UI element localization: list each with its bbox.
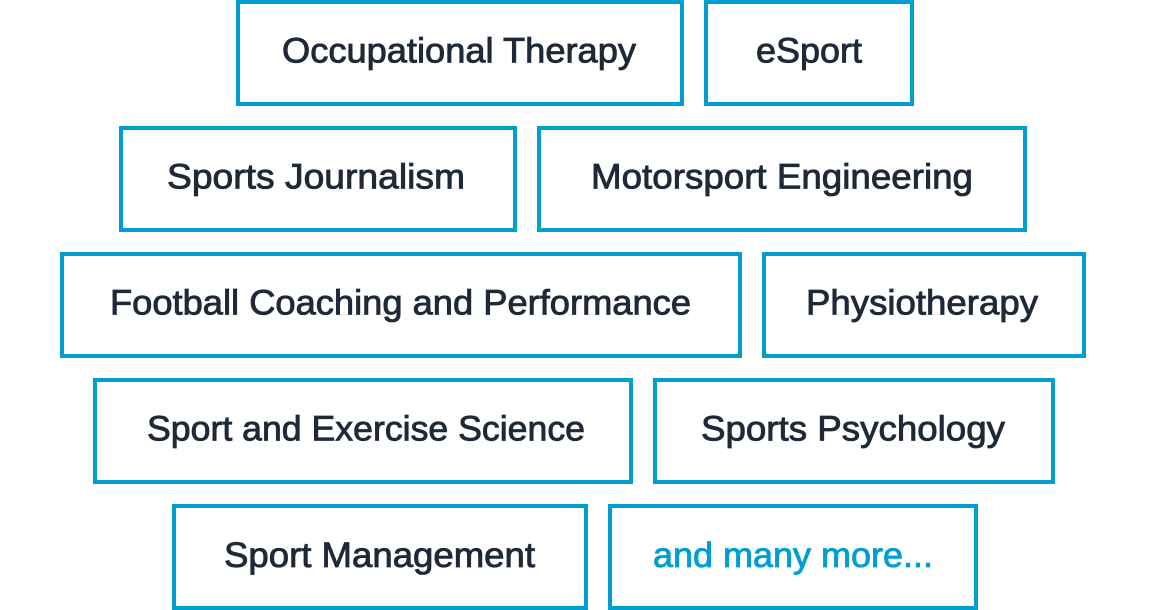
tag: Physiotherapy [764, 254, 1084, 356]
tag: Motorsport Engineering [539, 128, 1025, 230]
tag: Sport Management [174, 506, 586, 608]
tag: Occupational Therapy: Occupational Therapy [282, 32, 637, 70]
tag: and many more: and many more... [653, 536, 933, 575]
tag: and many more [610, 506, 976, 608]
tag: Occupational Therapy [238, 2, 682, 104]
tag: Sports Psychology: Sports Psychology [701, 410, 1006, 448]
tag: Football Coaching and Performance: Football Coaching and Performance [110, 284, 691, 322]
tag: Sports Journalism [121, 128, 515, 230]
tag: Motorsport Engineering: Motorsport Engineering [591, 158, 973, 196]
tag: eSport [706, 2, 912, 104]
tag: Sports Journalism: Sports Journalism [167, 158, 465, 196]
tag: Football Coaching and Performance [62, 254, 740, 356]
tag: Physiotherapy: Physiotherapy [806, 284, 1039, 322]
tag: Sport Management: Sport Management [224, 536, 535, 575]
tag: eSport: eSport [756, 32, 862, 70]
tag: Sports Psychology [655, 380, 1053, 482]
tag: Sport and Exercise Science: Sport and Exercise Science [147, 410, 585, 448]
tag: Sport and Exercise Science [95, 380, 631, 482]
